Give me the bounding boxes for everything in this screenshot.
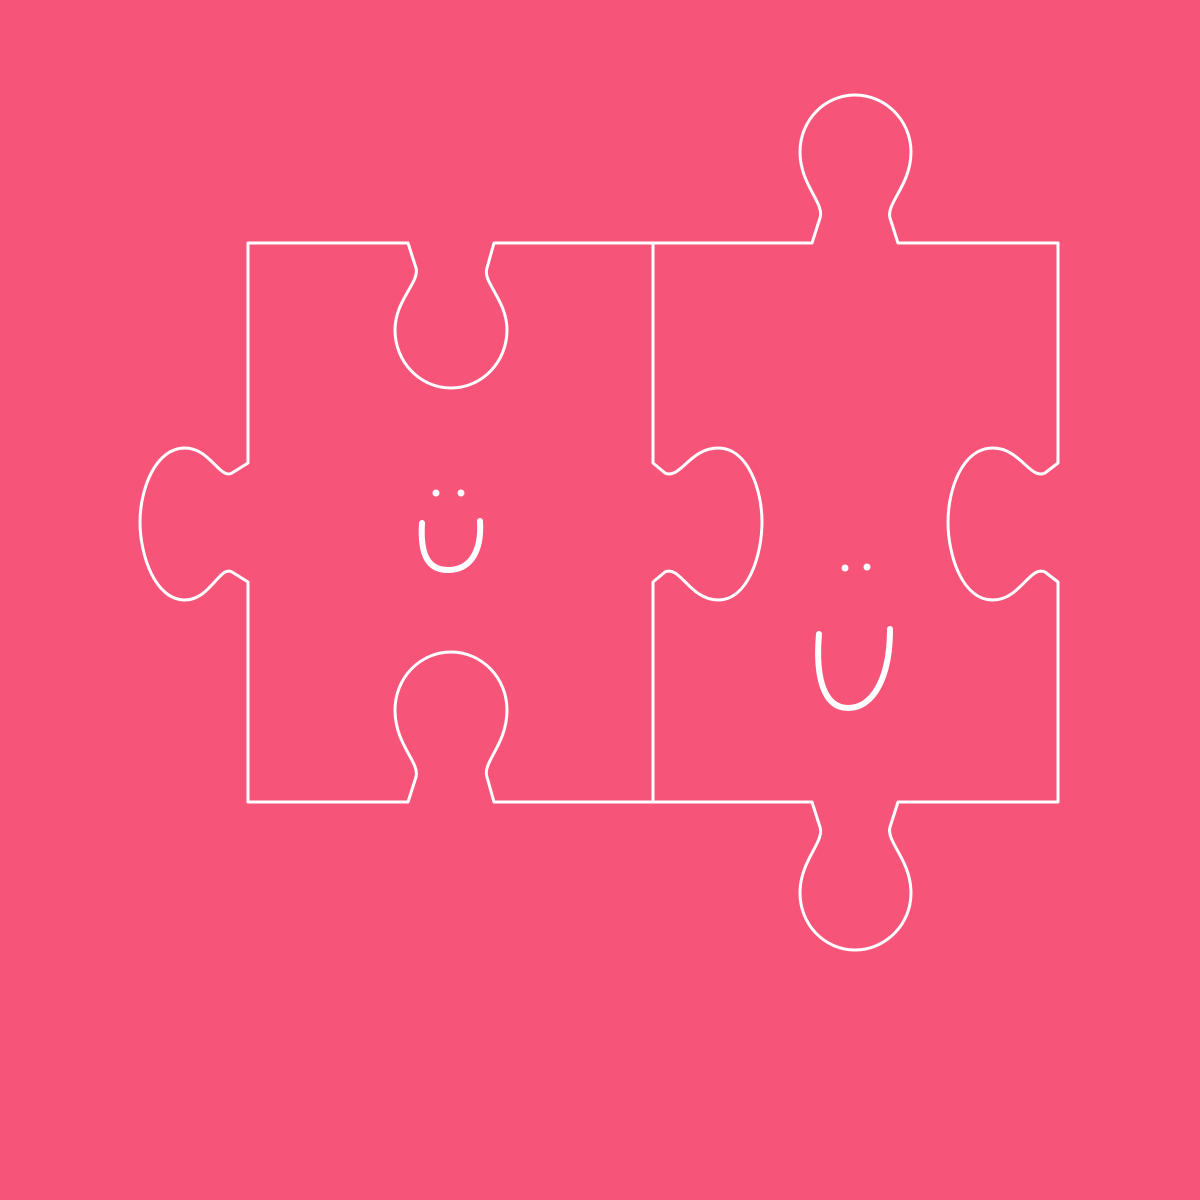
puzzle piece: left — [140, 243, 762, 802]
puzzle piece: right — [653, 95, 1058, 950]
face: right piece — [818, 564, 890, 708]
face: left piece — [422, 490, 480, 570]
